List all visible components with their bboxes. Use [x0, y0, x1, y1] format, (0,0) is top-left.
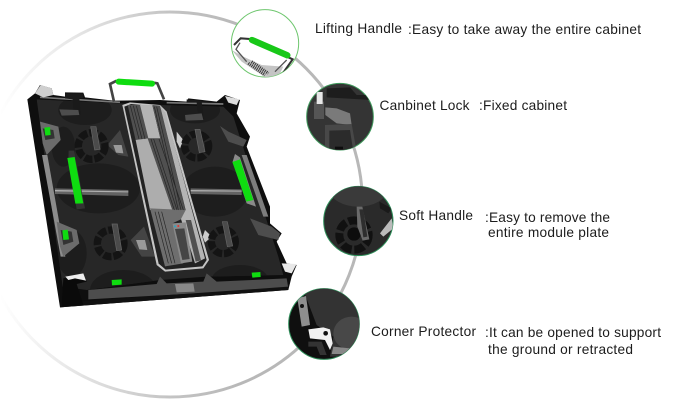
top locks	[59, 93, 280, 240]
label: corner protector	[371, 324, 661, 357]
grey bracket	[297, 296, 310, 327]
large grey arc	[0, 12, 362, 397]
LED cabinet product	[20, 81, 300, 310]
white protector	[308, 327, 333, 350]
grey frame section	[232, 50, 283, 78]
top corner bracket right	[225, 96, 239, 105]
spring hubs	[78, 133, 235, 257]
mesh plates	[52, 101, 266, 290]
central receiver box	[122, 102, 209, 272]
mesh plate	[333, 186, 384, 206]
detail circle: corner protector	[288, 288, 360, 360]
label: corner protector: Corner Protector	[371, 324, 476, 339]
lock housing	[325, 124, 357, 152]
soft handle levers	[91, 127, 233, 251]
status lights	[174, 225, 176, 227]
top silver band	[140, 105, 160, 138]
label: soft handle: Soft Handle	[399, 208, 473, 223]
bottom corner protector	[62, 273, 87, 307]
label: corner protector: the ground or retracted	[488, 342, 633, 357]
label: soft handle	[399, 208, 610, 240]
green grip	[252, 40, 287, 55]
mesh plate	[303, 287, 360, 357]
label: cabinet lock	[380, 98, 567, 113]
clip	[380, 218, 393, 237]
label: cabinet lock: :Fixed cabinet	[479, 98, 567, 113]
display panel	[172, 222, 192, 263]
label: soft handle: entire module plate	[488, 225, 609, 240]
cabinet frame	[27, 85, 297, 307]
label: lifting handle	[315, 21, 641, 37]
side brackets	[40, 122, 212, 257]
hub ring	[339, 220, 369, 250]
handle wire	[234, 38, 293, 75]
stripe lines	[130, 106, 183, 263]
latch body	[325, 107, 352, 125]
cross bars	[55, 188, 242, 196]
lower plate	[332, 347, 350, 354]
centre stripes	[148, 105, 186, 211]
label: corner protector: :It can be opened to support	[485, 325, 661, 340]
stripes	[248, 62, 268, 75]
left rail	[42, 155, 65, 257]
detail circle: soft handle	[323, 186, 394, 256]
small green tabs	[44, 127, 261, 285]
green side handles	[67, 151, 256, 209]
detail circle: cabinet lock	[307, 83, 373, 152]
label: lifting handle: Lifting Handle	[315, 21, 402, 36]
left stripes	[128, 105, 148, 140]
cabinet inner floor	[37, 100, 283, 290]
detail circle: lifting handle	[231, 10, 299, 78]
right silver band	[160, 106, 205, 263]
lock pin	[314, 102, 324, 119]
label: lifting handle: :Easy to take away the entire cabinet	[408, 22, 641, 37]
label: cabinet lock: Canbinet Lock	[380, 98, 470, 113]
top recess	[327, 87, 372, 100]
top corner bracket left	[35, 85, 53, 97]
bottom centre stripes	[175, 283, 195, 292]
frame top edge	[40, 97, 223, 104]
lever	[357, 207, 369, 241]
left silver panel	[136, 138, 172, 210]
lower grey panel	[150, 208, 186, 266]
right rail	[242, 155, 268, 217]
lower right stripes	[186, 220, 201, 262]
top lifting handle	[110, 81, 164, 102]
right bottom corner	[282, 263, 297, 273]
label: soft handle: :Easy to remove the	[485, 210, 610, 225]
bottom edge rail	[88, 273, 288, 299]
